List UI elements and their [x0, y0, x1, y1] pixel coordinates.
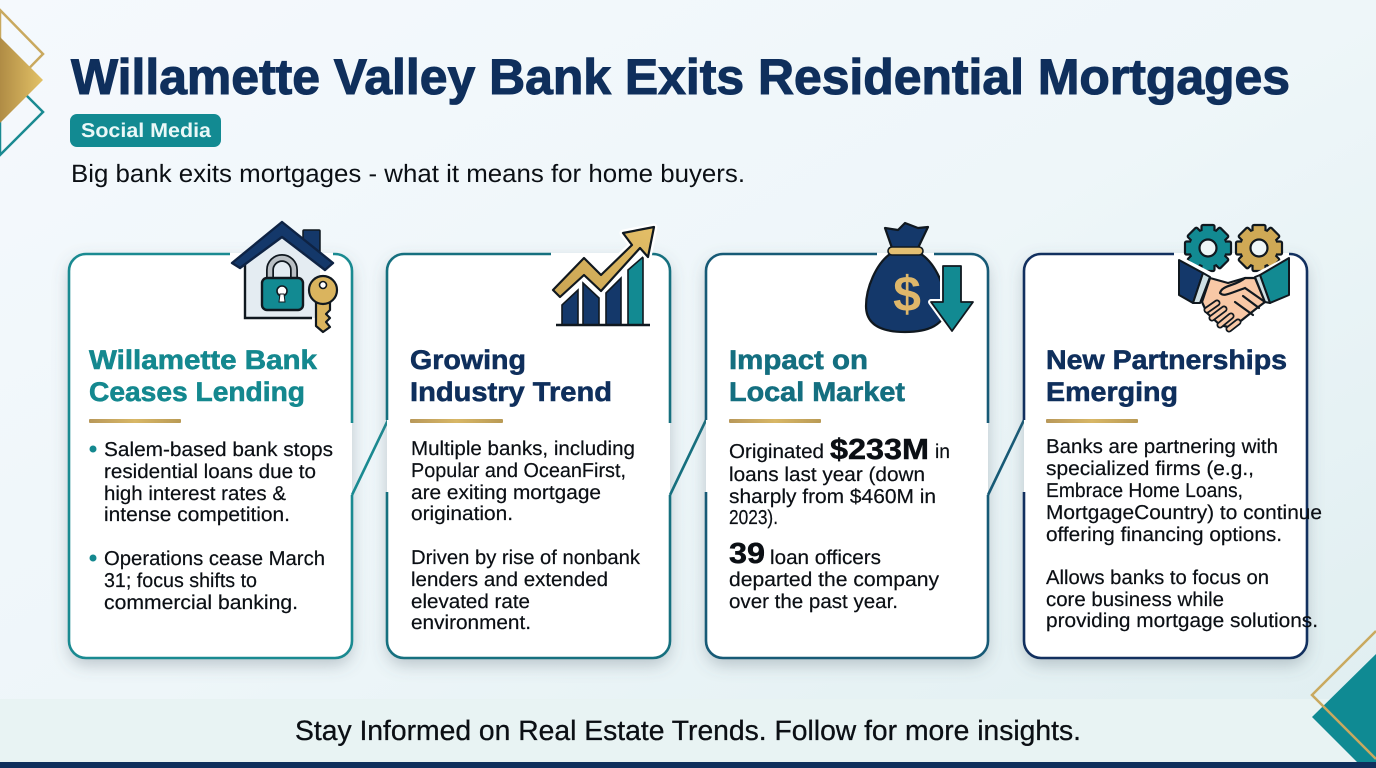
heading: Impact on — [729, 345, 868, 375]
stat: $233M: $233M — [830, 434, 929, 466]
heading — [1046, 345, 1287, 407]
bullet list: intense competition. — [104, 504, 290, 526]
heading: Local Market — [729, 377, 905, 407]
gold rule — [410, 419, 503, 423]
gold rule — [1046, 419, 1138, 423]
heading: Growing — [410, 345, 526, 375]
bullet list: Operations cease March — [104, 548, 325, 570]
body text: providing mortgage solutions. — [1046, 610, 1318, 632]
body text and key figures — [729, 434, 950, 613]
footer call to action: Stay Informed on Real Estate Trends. Follow for more insights. — [295, 715, 1081, 746]
body text — [1046, 436, 1322, 632]
body text and key figures: Originated — [729, 441, 824, 463]
connector arrow 3 — [988, 420, 1024, 495]
icon: growth chart with arrow — [553, 227, 654, 325]
body text: environment. — [411, 612, 531, 634]
heading: Industry Trend — [410, 377, 612, 407]
heading: Emerging — [1046, 377, 1178, 407]
icon: house lock and key — [232, 222, 337, 332]
body text and key figures: 2023). — [729, 507, 778, 529]
gold rule — [89, 419, 181, 423]
body text and key figures: over the past year. — [729, 591, 898, 613]
bullet list — [90, 439, 333, 614]
bullet list: commercial banking. — [104, 592, 298, 614]
body text: core business while — [1046, 589, 1224, 611]
icon: money bag with down arrow: $ — [893, 266, 921, 322]
heading — [89, 345, 318, 407]
body text and key figures: departed the company — [729, 569, 939, 591]
body text: MortgageCountry) to continue — [1046, 502, 1322, 524]
panel: New Partnerships Emerging — [1024, 225, 1322, 658]
decoration: bottom-right diamonds — [1312, 631, 1376, 762]
body text: specialized firms (e.g., — [1046, 458, 1254, 480]
bullet list: high interest rates & — [104, 483, 287, 505]
footer band — [0, 699, 1376, 768]
body text: offering financing options. — [1046, 524, 1282, 546]
body text: Banks are partnering with — [1046, 436, 1278, 458]
heading — [410, 345, 612, 407]
body text and key figures: in — [935, 441, 950, 463]
panel: Growing Industry Trend — [387, 227, 670, 658]
icon: money bag with down arrow — [866, 223, 973, 332]
panel: Willamette Bank Ceases Lending — [69, 222, 352, 658]
decoration: top-left diamonds — [0, 10, 43, 155]
body text and key figures: loan officers — [770, 547, 881, 569]
body text: elevated rate — [411, 591, 530, 613]
panel: Impact on Local Market — [706, 223, 988, 658]
stat: 39: 39 — [729, 538, 765, 570]
body text: lenders and extended — [411, 569, 608, 591]
body text: origination. — [411, 503, 513, 525]
body text: Popular and OceanFirst, — [411, 460, 626, 482]
connector arrow 2 — [670, 420, 706, 495]
icon: gold gear — [1236, 225, 1282, 271]
subtitle: Big bank exits mortgages - what it means for home buyers. — [71, 160, 745, 188]
heading: Willamette Bank — [89, 345, 318, 375]
gold rule — [729, 419, 821, 423]
icon: teal gear — [1185, 225, 1231, 271]
body text: Driven by rise of nonbank — [411, 547, 641, 569]
heading: Ceases Lending — [89, 377, 305, 407]
heading — [729, 345, 905, 407]
connector arrow 1 — [352, 420, 388, 495]
tag: Social Media — [70, 114, 221, 147]
body text — [411, 438, 641, 634]
tag: Social Media: Social Media — [81, 120, 212, 142]
body text: Multiple banks, including — [411, 438, 635, 460]
body text and key figures: loans last year (down — [729, 464, 925, 486]
bullet list: 31; focus shifts to — [104, 570, 257, 592]
body text: Embrace Home Loans, — [1046, 480, 1243, 502]
bullet list: residential loans due to — [104, 461, 316, 483]
body text: are exiting mortgage — [411, 482, 601, 504]
bullet list: Salem-based bank stops — [104, 439, 333, 461]
heading: New Partnerships — [1046, 345, 1287, 375]
body text and key figures: sharply from $460M in — [729, 486, 936, 508]
body text: Allows banks to focus on — [1046, 567, 1269, 589]
title: Willamette Valley Bank Exits Residential Mortgages — [71, 49, 1290, 105]
icon: handshake and gears — [1179, 225, 1289, 329]
